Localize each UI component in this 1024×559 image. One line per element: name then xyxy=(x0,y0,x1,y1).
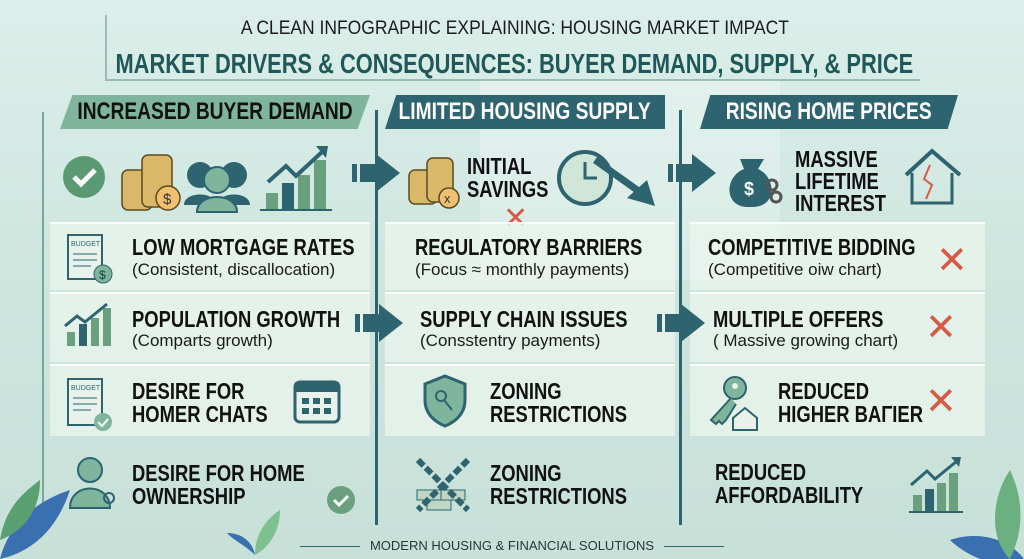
item: zoning 2: ZONING xyxy=(490,460,562,486)
item: zoning 1 xyxy=(424,374,627,428)
text: initial savings: SAVINGS xyxy=(467,176,548,202)
icon: coins x: x xyxy=(444,191,451,206)
item: reduced affordability: REDUCED xyxy=(715,459,806,485)
item: low mortgage rates: LOW MORTGAGE RATES xyxy=(132,234,354,260)
item: home ownership: DESIRE FOR HOME xyxy=(132,460,305,486)
item: competitive bidding: (Competitive oiw chart) xyxy=(708,260,882,279)
icon: budget clipboard xyxy=(67,234,112,284)
item: zoning 2: RESTRICTIONS xyxy=(490,483,627,509)
icon: check small xyxy=(327,486,355,514)
header: demand: INCREASED BUYER DEMAND xyxy=(77,98,353,125)
arrow 2 xyxy=(668,154,716,192)
icon: budget clipboard: $ xyxy=(99,268,106,282)
item: supply chain xyxy=(420,306,628,350)
icon: key house xyxy=(710,376,758,431)
icon row col1 xyxy=(63,146,332,213)
item: competitive bidding xyxy=(708,234,968,282)
icon: growth chart xyxy=(260,146,332,210)
main title: MARKET DRIVERS & CONSEQUENCES: BUYER DEMAND, SUPPLY, & PRICE xyxy=(116,48,913,79)
header: supply: LIMITED HOUSING SUPPLY xyxy=(399,98,651,125)
background window glow xyxy=(480,80,780,280)
col2 rows xyxy=(385,222,675,290)
item: zoning 1: RESTRICTIONS xyxy=(490,401,627,427)
col1 rows xyxy=(50,222,370,290)
item: reduced higher barrier: ✕ xyxy=(925,379,957,423)
icon: cracked house xyxy=(904,148,962,204)
item: low mortgage rates: (Consistent, discallocation) xyxy=(132,260,335,279)
footer: MODERN HOUSING & FINANCIAL SOLUTIONS xyxy=(370,538,654,553)
icon: clock arrow xyxy=(557,150,655,206)
icon: bar chart xyxy=(64,302,111,346)
text: initial savings: INITIAL xyxy=(467,153,531,179)
red x: ✕ xyxy=(503,201,528,236)
item: reduced affordability: AFFORDABILITY xyxy=(715,482,863,508)
item: reduced affordability xyxy=(715,457,963,513)
icon: budget check: BUDGET xyxy=(71,385,101,392)
item: supply chain: SUPPLY CHAIN ISSUES xyxy=(420,306,628,332)
item: population growth: (Comparts growth) xyxy=(132,331,273,350)
item: desire homer chats: HOMER CHATS xyxy=(132,401,268,427)
item: regulatory barriers xyxy=(415,234,642,279)
header: prices xyxy=(700,95,958,129)
icon: calendar xyxy=(294,380,340,424)
icon row col2 xyxy=(408,150,655,236)
icon: money bag xyxy=(729,159,782,207)
text: initial savings xyxy=(467,153,548,202)
item: zoning 1: ZONING xyxy=(490,378,562,404)
item: multiple offers: ( Massive growing chart) xyxy=(713,331,898,350)
icon: money bag: $ xyxy=(744,179,754,199)
item: low mortgage rates xyxy=(67,234,354,284)
item: desire homer chats: DESIRE FOR xyxy=(132,378,244,404)
item: reduced higher barrier xyxy=(710,376,957,431)
text: lifetime interest: INTEREST xyxy=(795,190,886,216)
text: lifetime interest xyxy=(795,146,886,216)
icon: coins x xyxy=(408,157,460,209)
item: population growth xyxy=(64,302,340,350)
dividers xyxy=(375,110,378,525)
arrow 4 xyxy=(657,304,705,342)
text: lifetime interest: LIFETIME xyxy=(795,168,879,194)
item: home ownership: OWNERSHIP xyxy=(132,483,245,509)
title block xyxy=(105,15,920,81)
subtitle: A CLEAN INFOGRAPHIC EXPLAINING: HOUSING MARKET IMPACT xyxy=(240,18,789,39)
item: regulatory barriers: REGULATORY BARRIERS xyxy=(415,234,642,260)
icon row col3 xyxy=(729,146,962,216)
icon: budget clipboard: BUDGET xyxy=(71,241,101,248)
item: population growth: POPULATION GROWTH xyxy=(132,306,340,332)
arrow 1 xyxy=(352,156,400,190)
col3 rows xyxy=(690,222,985,290)
icon: small growth chart xyxy=(909,457,963,513)
item: reduced higher barrier: HIGHER BAΓIER xyxy=(778,401,923,427)
icon: budget check xyxy=(67,378,112,431)
item: supply chain: (Consstentry payments) xyxy=(420,331,600,350)
item: zoning 2 xyxy=(416,458,627,512)
icon: person key xyxy=(69,457,115,509)
item: multiple offers: ✕ xyxy=(925,305,957,349)
item: competitive bidding: ✕ xyxy=(936,238,968,282)
icon: people xyxy=(184,162,250,212)
item: competitive bidding: COMPETITIVE BIDDING xyxy=(708,234,916,260)
item: multiple offers: MULTIPLE OFFERS xyxy=(713,306,883,332)
icon: chain bricks xyxy=(416,458,470,512)
item: home ownership xyxy=(69,457,355,514)
icon: coins: $ xyxy=(163,191,172,208)
arrow 3 xyxy=(355,304,403,342)
item: reduced higher barrier: REDUCED xyxy=(778,378,869,404)
icon: check xyxy=(63,156,105,198)
item: desire homer chats xyxy=(67,378,340,431)
text: lifetime interest: MASSIVE xyxy=(795,146,878,172)
header: prices: RISING HOME PRICES xyxy=(726,98,932,125)
icon: shield key xyxy=(424,374,466,428)
decorative leaves xyxy=(0,480,70,559)
item: multiple offers xyxy=(713,305,957,350)
icon: coins xyxy=(122,155,180,210)
item: regulatory barriers: (Focus ≈ monthly payments) xyxy=(415,260,629,279)
